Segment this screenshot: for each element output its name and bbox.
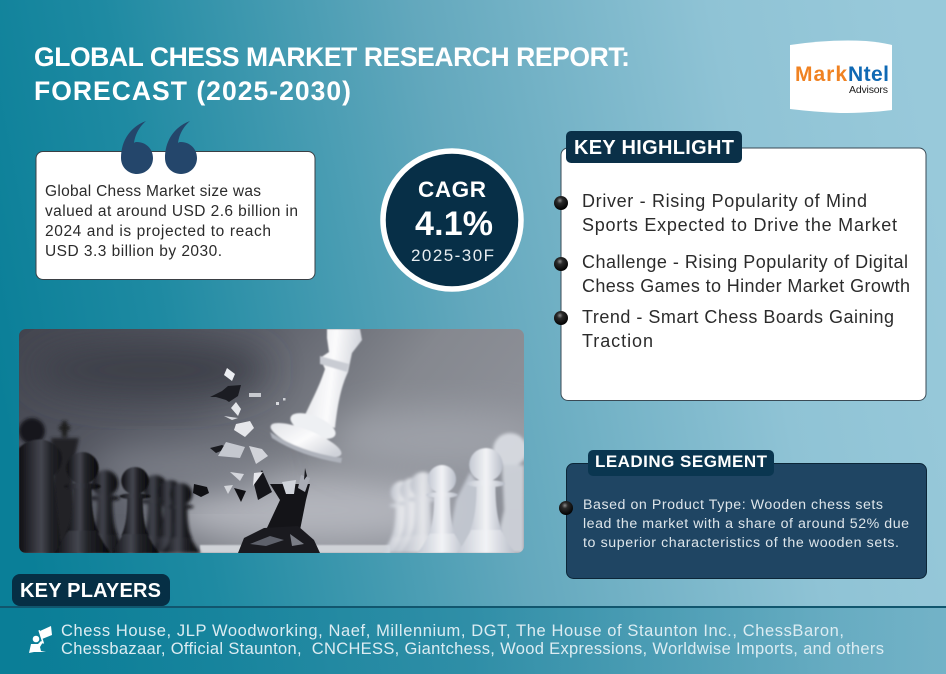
flying shards [193,368,307,502]
leading segment text: Based on Product Type: Wooden chess sets [583,497,883,513]
highlight: driver: Driver - Rising Popularity of Mind [582,191,867,211]
highlight: challenge: Chess Games to Hinder Market Growth [582,276,910,296]
title: FORECAST (2025-2030) [34,76,351,106]
heading: leading segment: LEADING SEGMENT [595,452,768,471]
icon: person with flag [29,626,52,653]
heading: key players: KEY PLAYERS [20,580,161,602]
market size text: 2024 and is projected to reach [45,223,271,240]
highlight: challenge: Challenge - Rising Popularity of Digital [582,252,908,272]
heading: leading segment [588,450,774,476]
photo: chess pieces [19,329,550,553]
icon: quotation marks [121,121,197,174]
heading: key highlight [566,131,742,163]
highlight: trend [554,307,894,351]
leading segment text: to superior characteristics of the wooden sets. [583,535,899,551]
highlight: challenge [554,252,910,296]
CAGR badge: CAGR [418,177,486,202]
market size text: Global Chess Market size was [45,183,261,200]
heading: key players [12,574,170,606]
CAGR badge [383,151,521,289]
key players text: Chess House, JLP Woodworking, Naef, Millennium, DGT, The House of Staunton Inc., ChessBaron, [61,622,844,640]
logo: MarkNtel Advisors [790,40,892,113]
white chess pieces [382,433,527,553]
panel: market size [36,152,315,280]
logo: MarkNtel Advisors: Ntel [848,63,889,86]
CAGR badge: 2025-30F [411,246,494,265]
panel: leading segment [559,450,926,578]
black chess pieces [19,418,201,553]
logo: MarkNtel Advisors: Advisors [849,84,888,96]
market size text [45,183,298,260]
title [34,42,630,106]
logo: MarkNtel Advisors: Mark [795,63,847,86]
market size text: valued at around USD 2.6 billion in [45,203,298,220]
market size text: USD 3.3 billion by 2030. [45,243,222,260]
leading segment text: lead the market with a share of around 52% due [583,516,909,532]
panel: key highlight [554,131,926,400]
key players text [61,622,884,658]
shattered black piece [238,470,320,553]
highlight: driver: Sports Expected to Drive the Market [582,215,897,235]
leading segment text [583,497,909,551]
key players text: Chessbazaar, Official Staunton, CNCHESS, Giantchess, Wood Expressions, Worldwise Imports, and others [61,640,884,658]
highlight: trend: Traction [582,331,653,351]
highlight: trend: Trend - Smart Chess Boards Gaining [582,307,894,327]
falling white queen [267,329,362,464]
CAGR badge: 4.1% [415,205,493,243]
heading: key highlight: KEY HIGHLIGHT [574,137,734,159]
icon: bullet [559,501,573,515]
highlight: driver [554,191,897,235]
title: GLOBAL CHESS MARKET RESEARCH REPORT: [34,42,630,72]
